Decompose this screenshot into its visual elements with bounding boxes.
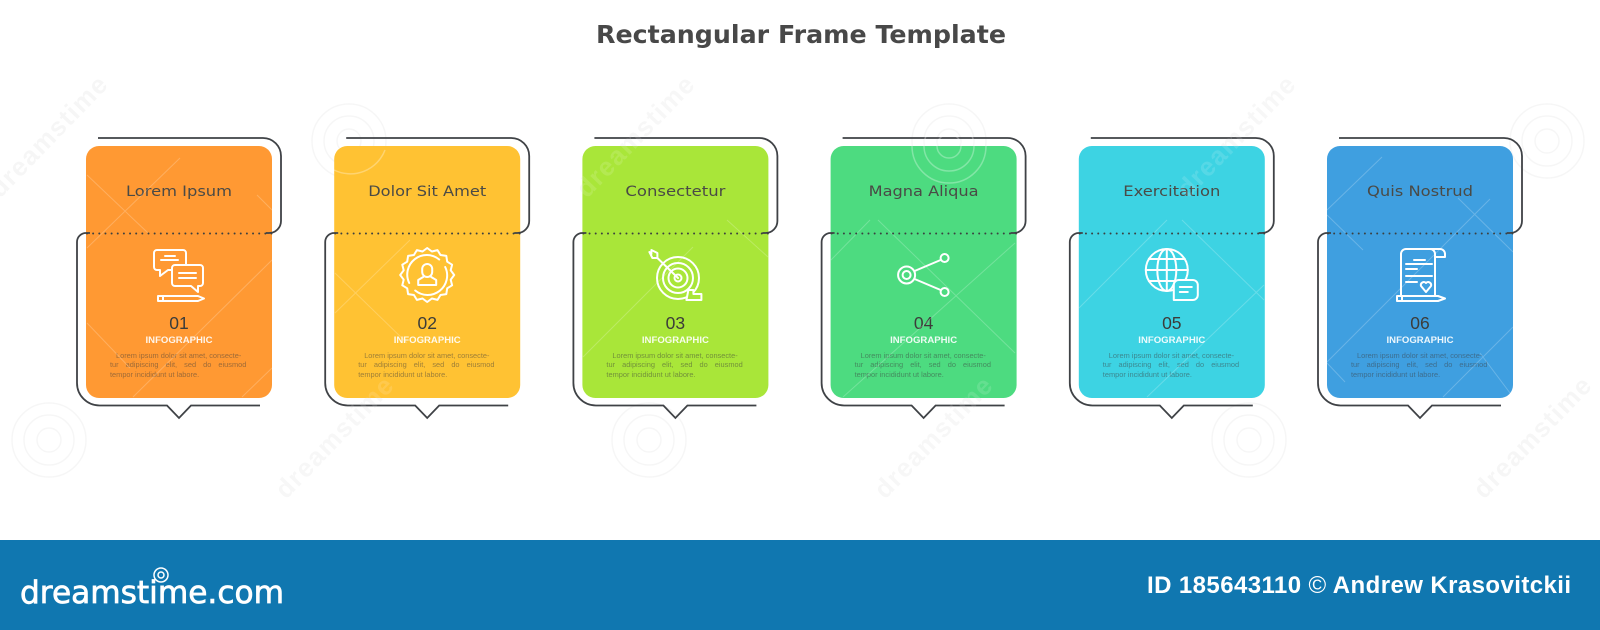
card 6: Quis Nostrud: Quis Nostrud (1367, 184, 1473, 200)
card 4: Magna Aliqua: INFOGRAPHIC (890, 335, 958, 345)
card 3: Consectetur: Consectetur (625, 184, 725, 200)
card 5: Exercitation: tur adipiscing elit, sed do eiusmod (1103, 360, 1239, 369)
card 1: Lorem Ipsum: tur adipiscing elit, sed do eiusmod (110, 360, 246, 369)
grey watermark on background: dreamstime (1467, 370, 1598, 504)
card 5: Exercitation: INFOGRAPHIC (1138, 335, 1206, 345)
card 1: Lorem Ipsum: Lorem ipsum dolor sit amet, consecte- (116, 351, 242, 360)
logo wordmark: dreamstime.com (20, 575, 284, 611)
card 3: Consectetur: 03 (666, 313, 685, 333)
card 5: Exercitation: tempor incididunt ut labore. (1103, 370, 1192, 379)
card 3: Consectetur: tur adipiscing elit, sed do eiusmod (606, 360, 743, 369)
grey watermark on background: dreamstime (868, 370, 999, 504)
card 5: Exercitation: Lorem ipsum dolor sit amet, consecte- (1109, 351, 1235, 360)
card 6: Quis Nostrud: tur adipiscing elit, sed do eiusmod (1351, 360, 1487, 369)
white watermark over cards: dreamstime (1171, 69, 1302, 203)
icon: badge with person (400, 248, 454, 302)
white watermark over cards: dreamstime (570, 69, 701, 203)
card 6: Quis Nostrud: Lorem ipsum dolor sit amet, consecte- (1357, 351, 1483, 360)
logo spiral (154, 568, 168, 582)
grey watermark on background: dreamstime (1171, 69, 1302, 203)
card 1: Lorem Ipsum: tempor incididunt ut labore. (110, 370, 199, 379)
card 2: Dolor Sit Amet: Dolor Sit Amet (368, 184, 487, 200)
card 3: Consectetur: INFOGRAPHIC (642, 335, 709, 345)
card 2: Dolor Sit Amet: Lorem ipsum dolor sit amet, consecte- (364, 351, 490, 360)
dotted divider lines (87, 232, 1513, 234)
card 3: Consectetur (573, 138, 777, 418)
grey watermark on background (0, 69, 1598, 504)
icon: share nodes (898, 254, 949, 296)
card 4: Magna Aliqua: tur adipiscing elit, sed do eiusmod (855, 360, 991, 369)
card 4: Magna Aliqua: tempor incididunt ut labore. (855, 370, 944, 379)
banner (0, 540, 1600, 630)
icon: chat bubbles and pencil (154, 250, 204, 301)
card 5: Exercitation: 05 (1162, 313, 1182, 333)
card 2: Dolor Sit Amet (325, 138, 529, 418)
white watermark over cards (87, 69, 1513, 504)
card 6: Quis Nostrud: tempor incididunt ut labore. (1351, 370, 1440, 379)
white watermark over cards: dreamstime (269, 370, 400, 504)
card 4: Magna Aliqua: Lorem ipsum dolor sit amet, consecte- (861, 351, 986, 360)
card 5: Exercitation: Exercitation (1123, 184, 1220, 200)
icon: target with arrow (649, 250, 701, 300)
card 2: Dolor Sit Amet: 02 (417, 313, 437, 333)
card 3: Consectetur: Lorem ipsum dolor sit amet, consecte- (612, 351, 738, 360)
card 2: Dolor Sit Amet: tur adipiscing elit, sed do eiusmod (358, 360, 495, 369)
card 1: Lorem Ipsum: INFOGRAPHIC (146, 335, 213, 345)
card 6: Quis Nostrud: 06 (1410, 313, 1430, 333)
card 2: Dolor Sit Amet: INFOGRAPHIC (394, 335, 461, 345)
card 4: Magna Aliqua: 04 (914, 313, 934, 333)
card 3: Consectetur: tempor incididunt ut labore. (606, 370, 696, 379)
card 4: Magna Aliqua (822, 138, 1026, 418)
grey watermark on background: dreamstime (570, 69, 701, 203)
card 2: Dolor Sit Amet: tempor incididunt ut labore. (358, 370, 447, 379)
card 1: Lorem Ipsum: Lorem Ipsum (126, 184, 232, 200)
card 6: Quis Nostrud: INFOGRAPHIC (1386, 335, 1454, 345)
grey watermark on background: dreamstime (269, 370, 400, 504)
card 4: Magna Aliqua: Magna Aliqua (869, 184, 979, 200)
card 1: Lorem Ipsum: 01 (169, 313, 189, 333)
card 5: Exercitation (1070, 138, 1274, 418)
icon: scroll with heart and pencil (1397, 249, 1445, 301)
card 1: Lorem Ipsum (77, 138, 281, 418)
card 6: Quis Nostrud (1318, 138, 1522, 418)
image credit: ID 185643110 © Andrew Krasovitckii (1147, 572, 1571, 599)
white watermark over cards: dreamstime (868, 370, 999, 504)
title: Rectangular Frame Template (596, 20, 1006, 49)
icon: globe with speech bubble (1146, 249, 1198, 300)
